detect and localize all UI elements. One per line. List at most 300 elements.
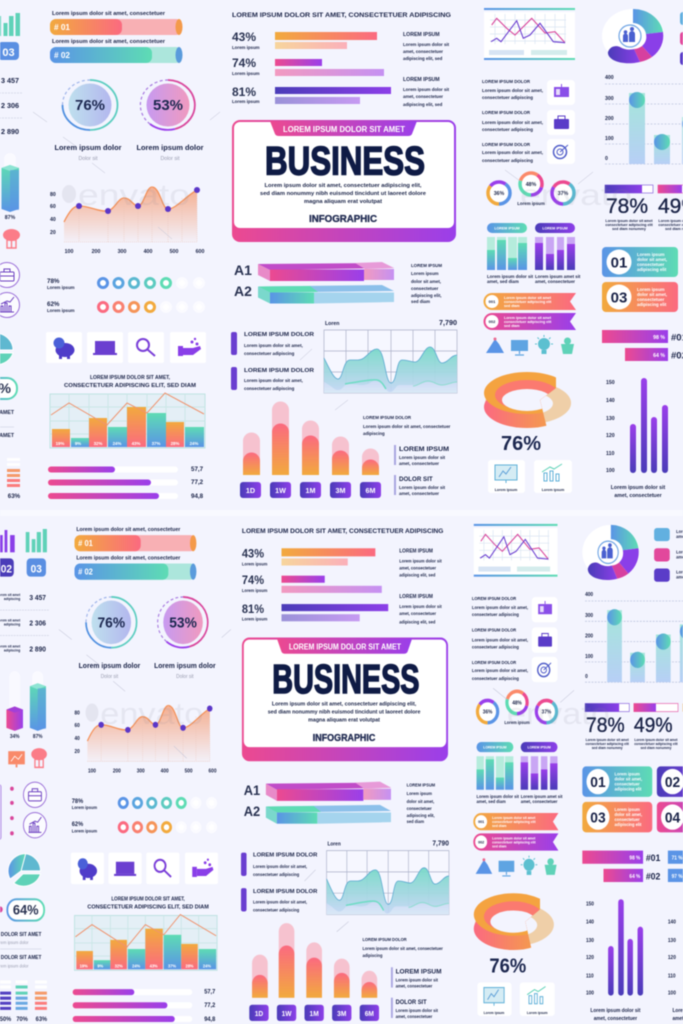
gauge captions: Dolor sit [78,156,98,162]
ring rating rows [47,278,204,313]
purple column chart: 110 [586,973,594,979]
icon: briefcase [538,633,552,647]
period buttons: 1D [246,486,255,495]
icon list: consectetuer adipiscing [482,127,533,132]
ribbon labels: Lorem ipsum dolor sit amet [504,296,552,300]
numbered cards [582,766,683,832]
watermark: envato [78,179,190,212]
area line chart: 400 [161,768,169,775]
twin striped column groups: Lorem ipsum amet sit [535,274,581,279]
percent stats: consectetuer adipiscing elit [585,742,630,746]
rounded column chart [243,402,379,475]
pill column chart: 0 [585,674,588,680]
icon list: Lorem ipsum dolor sit amet, [472,668,528,673]
bar and line combo chart: CONSECTETUER ADIPISCING ELIT, SED DIAM [87,904,209,911]
numbered cards: Lorem ipsum [637,287,665,292]
twin striped column groups: LOREM IPSUM [527,745,551,750]
comparison notes: adipiscing elit, sed [399,572,436,578]
comparison notes: adipiscing elit, sed [403,56,443,61]
percent stats: consectetuer adipiscing elit [605,223,653,227]
ribbon labels: 001 [489,299,496,304]
gauge captions: Lorem ipsum dolor [154,663,216,670]
3D bars notes [411,263,442,304]
comparison bars: 81% [232,85,256,99]
period buttons: 1W [282,1011,292,1018]
edge stacked bars: 63% [36,1017,48,1023]
area line chart: 40 [50,217,56,223]
edge bar charts and badges: 02 [1,563,12,576]
numbered cards: consectetuer [637,297,665,302]
comparison bars: Lorem ipsum [232,45,260,50]
comparison notes: LOREM IPSUM [399,594,433,600]
business title card [242,638,448,761]
bar and line combo chart: 19% [80,963,88,968]
icon: piggy bank [78,858,97,880]
horizontal progress bars: 57,7 [191,466,204,473]
twin striped column groups: Lorem ipsum dolor sit [487,274,534,279]
period buttons [249,1005,379,1021]
percent stats: sed diam nonummy [612,227,646,231]
divider band between sheets [0,510,683,516]
period buttons: 6M [366,486,376,495]
icon list [482,79,575,164]
big donut with people icon [602,9,664,63]
bar and line combo chart: 9% [75,441,81,446]
3D bars notes: LOREM IPSUM [411,263,442,268]
icon list: LOREM IPSUM DOLOR [472,596,516,601]
chart icon cards: Lorem ipsum [542,488,564,492]
icon cards [46,332,206,363]
icon: magnifier [155,860,171,877]
3D bars notes: dolor sit amet, [407,799,434,804]
area line chart [74,706,217,775]
purple column chart: Lorem ipsum dolor sit [611,485,666,491]
watermark: envato [507,698,610,731]
edge stacked bars: 63% [8,493,21,500]
numbered cards: Lorem ipsum [615,807,640,812]
description: magna aliquam erat volutpat [308,718,380,724]
edge number list [0,76,22,136]
percent stats: 78% [586,714,625,737]
bar and line combo chart: 19% [56,441,64,446]
numbered cards: adipiscing elit [615,822,642,827]
pill column chart: 100 [605,136,614,142]
column chart notes: amet, consectetuer [399,491,439,496]
purple column chart: 120 [668,955,676,961]
description: magna aliquam erat volutpat [304,199,382,205]
side notes with markers: LOREM IPSUM DOLOR [253,852,318,859]
area chart with grid: Loren [328,841,341,848]
edge pie and 64% pill: 64% [13,902,39,918]
numbered cards: adipiscing elit [615,787,642,792]
subtitle: INFOGRAPHIC [309,214,377,225]
comparison bars: 43% [232,30,256,44]
area line chart: 80 [74,710,80,717]
ring rating rows: Lorem ipsum [72,805,97,810]
comparison notes: LOREM IPSUM [399,548,433,554]
comparison bars: 43% [242,547,265,561]
icon: briefcase [554,116,569,129]
area line chart: 20 [74,749,80,755]
progress cylinders: # 01 [54,23,70,32]
side notes with markers: LOREM IPSUM DOLOR [253,889,318,895]
3D bars notes: dolor sit amet, [411,279,441,284]
edge stacked bars: 70% [16,1017,28,1023]
tab [270,121,417,136]
gauge 53%: 53% [153,97,183,114]
description [268,701,421,724]
section heading: LOREM IPSUM DOLOR SIT AMET, CONSECTETUER ADIPISCING [242,529,444,535]
period buttons: 1D [255,1011,263,1018]
edge icons: monitor and cloud [0,229,20,248]
gauge 76%: 76% [75,97,105,114]
tab: LOREM IPSUM DOLOR SIT AMET [289,642,401,652]
bar and line combo chart: 24% [203,963,211,968]
edge number list: adipiscing [4,649,20,653]
percent stats: 78% [606,195,648,218]
bar and line combo chart: 24% [113,441,121,446]
3D bars notes: Lorem ipsum [407,791,432,796]
icon list: consectetuer adipiscing [472,645,519,650]
edge number list: 3 457 [29,595,46,602]
area line chart: 400 [144,249,152,255]
3D bars A1 A2: A2 [244,804,260,819]
area chart with grid [327,840,449,914]
icon: laptop [93,341,117,355]
donut labels: 37% [542,709,552,716]
side notes with markers: Lorem ipsum dolor sit amet, [244,378,303,383]
chart icon cards: Lorem ipsum [484,1011,504,1015]
area line chart: 200 [113,768,121,775]
bar and line combo chart: 24% [132,963,140,968]
percent stats: Lorem ipsum dolor sit amet [605,219,653,223]
edge number list: adipiscing [4,622,20,626]
donut labels: Lorem ipsum [504,720,530,725]
numbered cards: 03 [611,290,627,306]
gauge captions: Dolor sit [101,674,119,680]
comparison notes: Lorem ipsum dolor sit [399,604,442,609]
column chart notes: adipiscing [363,431,385,436]
side notes with markers: LOREM IPSUM DOLOR [244,332,314,338]
progress cylinders: # 02 [78,567,93,577]
gauge 76% [86,597,137,648]
purple column chart: 140 [668,919,676,926]
3D bars notes: sed diam [407,819,424,824]
twin striped column groups: amet, sed diam [487,279,519,284]
horizontal progress bars: 57,7 [204,989,216,996]
period buttons: 6M [365,1011,374,1018]
percent stats: sed diam nonummy [592,746,623,750]
percent tag bars [582,851,683,882]
3D ring [484,372,571,455]
chart icon cards [488,460,572,493]
icon: hand with coins [178,338,201,356]
area line chart: 40 [74,736,80,742]
icon list: Lorem ipsum dolor sit amet, [482,120,543,125]
side notes with markers: consectetuer adipiscing [253,872,300,877]
edge number list: 2 890 [29,647,46,654]
column chart notes: DOLOR SIT [399,476,433,483]
3D ring: 76% [489,955,526,978]
comparison bars: 81% [242,603,265,616]
3D bars notes [407,782,436,824]
column chart notes: amet, consectetuer [396,1014,433,1019]
sheet: lower infographic [0,524,683,1023]
comparison notes: adipiscing elit, sed [403,102,443,107]
percent tag bars: 71 % [672,856,683,862]
description: sed diam nonummy nibh euismod tincidunt ut laoreet dolore [260,191,426,197]
percent stats [585,703,683,750]
bar and line combo chart: 43% [132,441,140,446]
edge stacked bars [0,980,48,1023]
3D bars notes: consectetuer [407,806,432,811]
purple column chart [606,378,683,499]
progress cylinders: # 01 [78,539,93,548]
3D bars notes: adipiscing elit, [411,293,442,298]
side notes with markers [231,332,314,391]
3D bars notes: Lorem ipsum [411,271,439,276]
icon list: consectetuer adipiscing [482,158,533,163]
gauge captions [79,663,216,680]
ribbon labels: consectetuer adipiscing elit [504,300,552,304]
area line chart: 60 [74,723,80,729]
progress cylinders [74,527,196,580]
ring rating rows: 62% [47,301,60,308]
pill column chart: 400 [605,75,614,81]
numbered cards: Lorem ipsum [615,771,640,777]
3D ring [474,893,554,978]
edge circle icons [0,262,20,319]
business title card [232,120,456,242]
column chart notes: LOREM IPSUM [399,446,449,453]
twin striped column groups: Lorem ipsum amet sit [521,794,563,799]
ring rating rows [72,798,216,833]
numbered cards: adipiscing elit [637,267,667,272]
ribbon labels: sed diam [492,844,506,849]
twin striped column groups: LOREM IPSUM [542,226,568,230]
donut labels: 48% [526,182,537,188]
pill column chart: 300 [605,96,614,102]
bar and line combo chart [50,375,205,448]
side notes with markers: Lorem ipsum dolor sit amet, [253,899,307,904]
ribbon labels: 001 [478,819,485,824]
icon list: consectetuer adipiscing [472,612,519,617]
ribbon labels: 002 [478,839,484,845]
edge number list [0,593,49,654]
column chart notes: DOLOR SIT [396,1000,427,1006]
icon list: Lorem ipsum dolor sit amet, [482,88,543,93]
side notes with markers: consectetuer adipiscing [244,351,295,356]
gauge 76%: 76% [97,615,125,632]
percent tag bars: 98 % [629,856,641,862]
area line chart: 80 [50,192,56,198]
3D bars A1 A2: A1 [234,262,252,278]
icon list: Lorem ipsum dolor sit amet, [472,605,528,610]
edge 3D bars: 87% [33,734,43,740]
purple column chart: 120 [606,433,615,439]
3D bars notes: sed diam [411,299,430,304]
column chart notes: Lorem ipsum dolor sit [396,1008,439,1013]
column chart notes: LOREM IPSUM DOLOR [362,937,407,942]
icon list: LOREM IPSUM DOLOR [472,660,516,665]
ring rating rows: 62% [72,822,84,828]
percent tag bars: 64 % [653,353,665,359]
edge number list: 2 890 [1,127,19,136]
icon list [472,596,558,682]
rounded column chart [252,923,377,998]
numbered cards: 01 [590,775,606,791]
edge 3D bars [0,153,19,221]
ribbon labels: Lorem ipsum dolor sit amet [492,836,536,840]
purple column chart: 120 [586,955,594,961]
purple column chart: 130 [606,416,615,422]
comparison notes: LOREM IPSUM [403,32,440,38]
3D bars A1 A2: A1 [244,782,261,798]
purple column chart: amet, consectetuer [614,493,662,499]
ribbon labels: Lorem ipsum dolor sit amet [504,316,552,320]
column chart notes: Lorem ipsum dolor sit [396,977,439,983]
area line chart: 500 [170,249,178,255]
numbered cards: dolor sit amet, [615,776,642,782]
comparison notes: amet, consectetuer [399,565,436,571]
donut labels: Lorem ipsum [517,201,545,206]
area chart with grid [324,318,457,393]
numbered cards: 02 [665,775,680,791]
horizontal progress bars [73,989,216,1023]
gauge captions: Dolor sit [160,156,180,162]
edge pie and 64% pill [0,854,44,921]
edge bar charts and badges: 03 [2,47,15,59]
icon: sign board [538,601,552,614]
progress cylinders [50,11,182,63]
ribbon labels: sed diam [504,304,520,308]
bar and line combo chart: 24% [190,441,198,446]
bar and line combo chart [74,896,217,970]
3D bars notes: adipiscing elit, [407,813,435,818]
percent tag bars: 98 % [653,335,665,341]
bar and line combo chart: LOREM IPSUM DOLOR SIT AMET, [111,896,185,902]
edge bar charts and badges: 03 [31,563,42,576]
ring rating rows: 78% [47,278,60,285]
edge number list: 2 306 [1,101,19,110]
3D bars notes: LOREM IPSUM [407,782,436,788]
title: BUSINESS [272,657,419,702]
comparison bars: 74% [232,56,256,70]
comparison bars [242,547,388,621]
ring rating rows: Lorem ipsum [47,308,75,313]
progress cylinders: Lorem ipsum dolor sit amet, consectetuer [52,39,165,45]
purple column chart: 100 [586,990,594,997]
area line chart: 200 [92,249,100,255]
pill column chart: 100 [585,654,593,660]
percent stats: consectetuer adipiscing elit [634,742,678,746]
percent tag bars [602,330,683,362]
percent tag bars: #02 [646,871,660,882]
gauge 53% [158,597,208,648]
purple column chart [586,899,683,1022]
percent stats: Lorem ipsum dolor sit amet [586,738,630,742]
pill column chart: 200 [585,633,593,640]
column chart notes [362,937,443,1019]
progress cylinders: Lorem ipsum dolor sit amet, consectetuer [52,11,165,17]
chart icon cards [477,982,555,1016]
twin striped column groups: Lorem ipsum dolor sit [477,794,519,799]
percent stats: 49% [634,714,673,737]
icon cards [71,853,218,884]
donut labels [483,700,552,725]
icon: magnifier [137,339,155,356]
side notes with markers: Lorem ipsum dolor sit amet, [244,343,303,348]
icon list: LOREM IPSUM DOLOR [472,627,516,633]
ribbon labels: consectetuer adipiscing elit [492,840,536,845]
gauge captions: Lorem ipsum dolor [79,663,141,670]
bar and line combo chart: 28% [185,963,194,968]
ring rating rows: Lorem ipsum [72,828,97,833]
watermark [33,112,632,410]
donut labels: 36% [494,191,505,197]
icon: laptop [114,862,136,876]
bar and line combo chart: 32% [94,441,102,446]
bar and line combo chart: 43% [150,963,158,968]
icon list: LOREM IPSUM DOLOR [482,110,531,115]
edge pie and 64% pill [0,333,17,399]
edge bar charts and badges [0,529,47,577]
pill column chart [605,75,683,164]
donut labels: 36% [483,709,493,716]
line chart card [474,524,558,577]
description [260,183,426,205]
purple column chart: 150 [606,380,615,386]
chart icon cards: Lorem ipsum [495,488,517,492]
column chart notes: amet, consectetuer [399,461,439,466]
icon list: consectetuer adipiscing [472,676,519,681]
bar and line combo chart: LOREM IPSUM DOLOR SIT AMET, [90,375,171,381]
icon: hand with coins [192,858,213,877]
ring rating rows: Lorem ipsum [47,285,75,290]
ribbon labels [484,293,576,330]
area line chart: 600 [196,249,204,255]
icon list: Lorem ipsum dolor sit amet, [472,637,528,643]
icon row [486,335,574,355]
comparison bars: Lorem ipsum [242,561,268,567]
purple column chart: 150 [586,901,594,907]
percent stats: Lorem ipsum dolor sit amet [634,738,678,742]
period buttons: 3M [336,486,346,495]
pill column chart: 300 [585,613,593,619]
purple column chart: 130 [668,938,676,944]
column chart notes: Lorem ipsum dolor sit [399,455,446,460]
description: Lorem ipsum dolor sit amet, consectetuer adipiscing elit, [272,701,417,708]
ribbon labels: sed diam [504,324,520,328]
bar and line combo chart: 9% [97,963,103,968]
progress cylinders: Lorem ipsum dolor sit amet, consectetuer [76,555,180,562]
watermark [59,629,610,932]
edge 3D bars: 34% [10,734,20,740]
comparison notes: Lorem ipsum dolor sit [403,42,450,47]
area line chart: 20 [50,230,56,236]
area line chart [50,187,204,255]
numbered cards: consectetuer [637,262,665,267]
icon row [476,856,557,876]
watermark: envato [100,698,203,731]
ribbon labels: consectetuer adipiscing elit [492,820,536,824]
section heading: LOREM IPSUM DOLOR SIT AMET, CONSECTETUER ADIPISCING [232,12,451,19]
gauge captions: Lorem ipsum dolor [136,143,204,152]
horizontal progress bars: 94,8 [204,1017,216,1023]
3D bars A1 A2 [244,782,391,824]
purple column chart: amet, consectetuer [594,1016,637,1022]
tab: LOREM IPSUM DOLOR SIT AMET [283,125,405,134]
